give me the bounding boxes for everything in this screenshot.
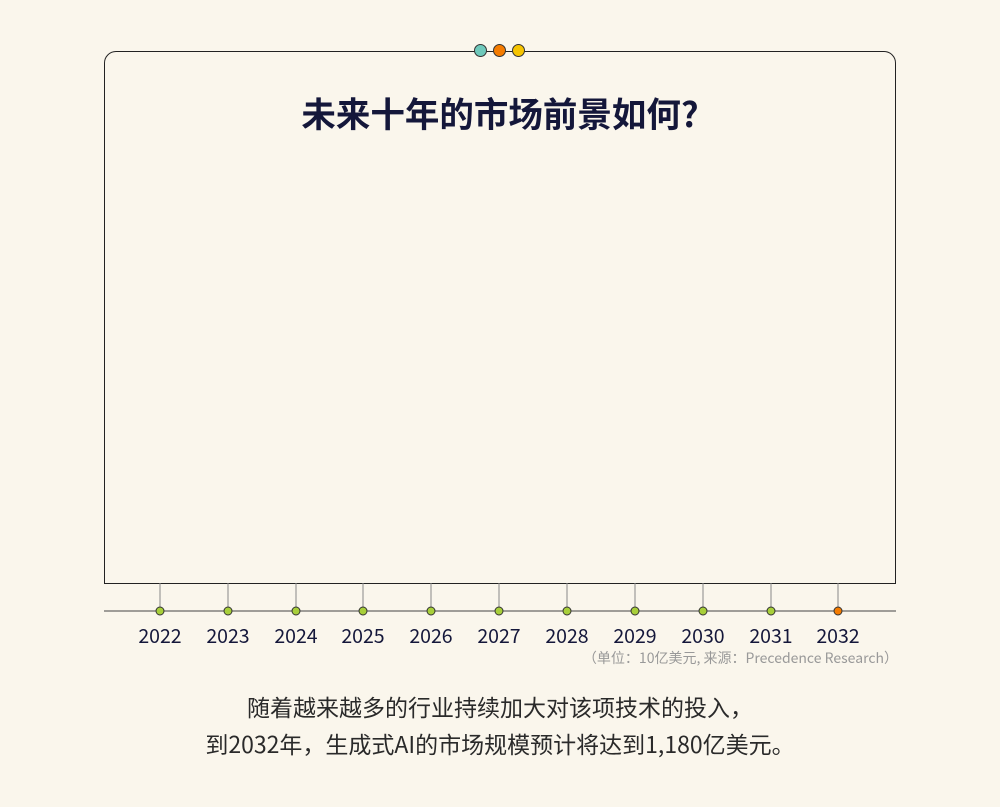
year labels: 2031 [749, 620, 793, 649]
year labels: 2025 [341, 620, 385, 649]
panel: chart frame [104, 51, 896, 584]
caption text: 随着越来越多的行业持续加大对该项技术的投入， [247, 689, 753, 723]
year labels: 2027 [477, 620, 521, 649]
source note: （单位：10亿美元, 来源：Precedence Research） [583, 648, 898, 668]
year labels: 2030 [681, 620, 725, 649]
year labels: 2023 [206, 620, 250, 649]
year labels: 2026 [409, 620, 453, 649]
caption text: 到2032年，生成式AI的市场规模预计将达到1,180亿美元。 [205, 726, 795, 760]
year labels: 2024 [274, 620, 318, 649]
caption text [205, 689, 795, 760]
year labels: 2028 [545, 620, 589, 649]
title: 未来十年的市场前景如何? [301, 87, 699, 137]
year labels: 2032 [816, 620, 860, 649]
year labels: 2022 [138, 620, 182, 649]
year labels: 2029 [613, 620, 657, 649]
icon: window dots [474, 44, 525, 57]
